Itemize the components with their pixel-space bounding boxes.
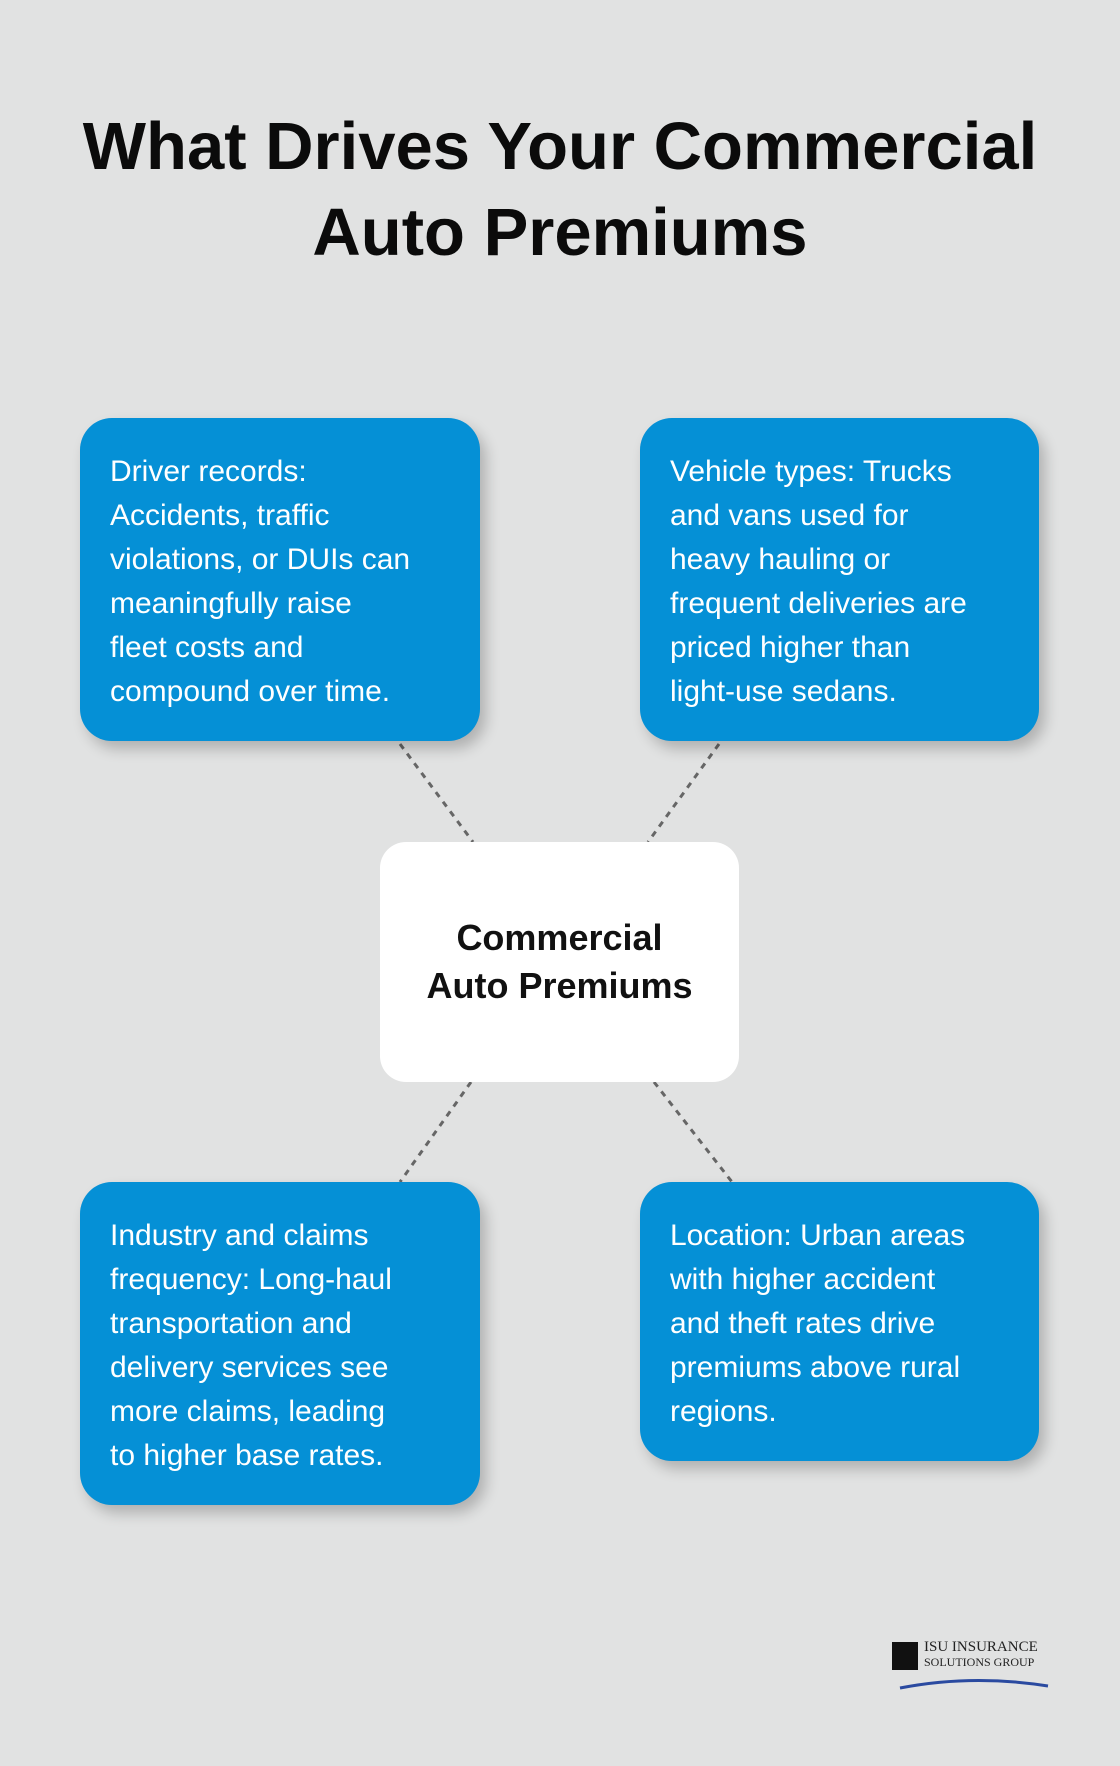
center node [380,842,739,1082]
panel: location: premiums above rural [670,1351,960,1384]
panel: driver records: meaningfully raise [110,587,352,620]
panel: industry: transportation and [110,1307,352,1340]
panel: industry: more claims, leading [110,1395,385,1428]
panel: industry: frequency: Long-haul [110,1263,392,1296]
title [82,109,1037,270]
panel: location [640,1182,1039,1461]
panel: vehicle types [640,418,1039,741]
panel: location: Location: Urban areas [670,1219,965,1252]
panel: location: with higher accident [670,1263,935,1296]
panel: vehicle types: frequent deliveries are [670,587,967,620]
panel: industry [80,1182,480,1505]
panel: industry: Industry and claims [110,1219,368,1252]
panel: vehicle types: priced higher than [670,631,910,664]
center node: Commercial [456,917,663,958]
logo: SOLUTIONS GROUP [924,1655,1034,1669]
panel: driver records: fleet costs and [110,631,303,664]
panel: vehicle types: and vans used for [670,499,908,532]
panel: location: and theft rates drive [670,1307,935,1340]
panel: vehicle types: light-use sedans. [670,675,897,708]
panel: industry: to higher base rates. [110,1439,384,1472]
panel: location: regions. [670,1395,777,1428]
panel: industry: delivery services see [110,1351,388,1384]
panel: driver records [80,418,480,741]
panel: driver records: compound over time. [110,675,390,708]
panel: vehicle types: heavy hauling or [670,543,890,576]
title: Auto Premiums [312,195,808,270]
panel: driver records: Accidents, traffic [110,499,330,532]
panel: vehicle types: Vehicle types: Trucks [670,455,952,488]
center node: Auto Premiums [426,965,693,1006]
logo: ISU INSURANCE [924,1639,1038,1655]
title: What Drives Your Commercial [83,109,1037,184]
panel: driver records: violations, or DUIs can [110,543,410,576]
panel: driver records: Driver records: [110,455,307,488]
logo [892,1639,1048,1690]
